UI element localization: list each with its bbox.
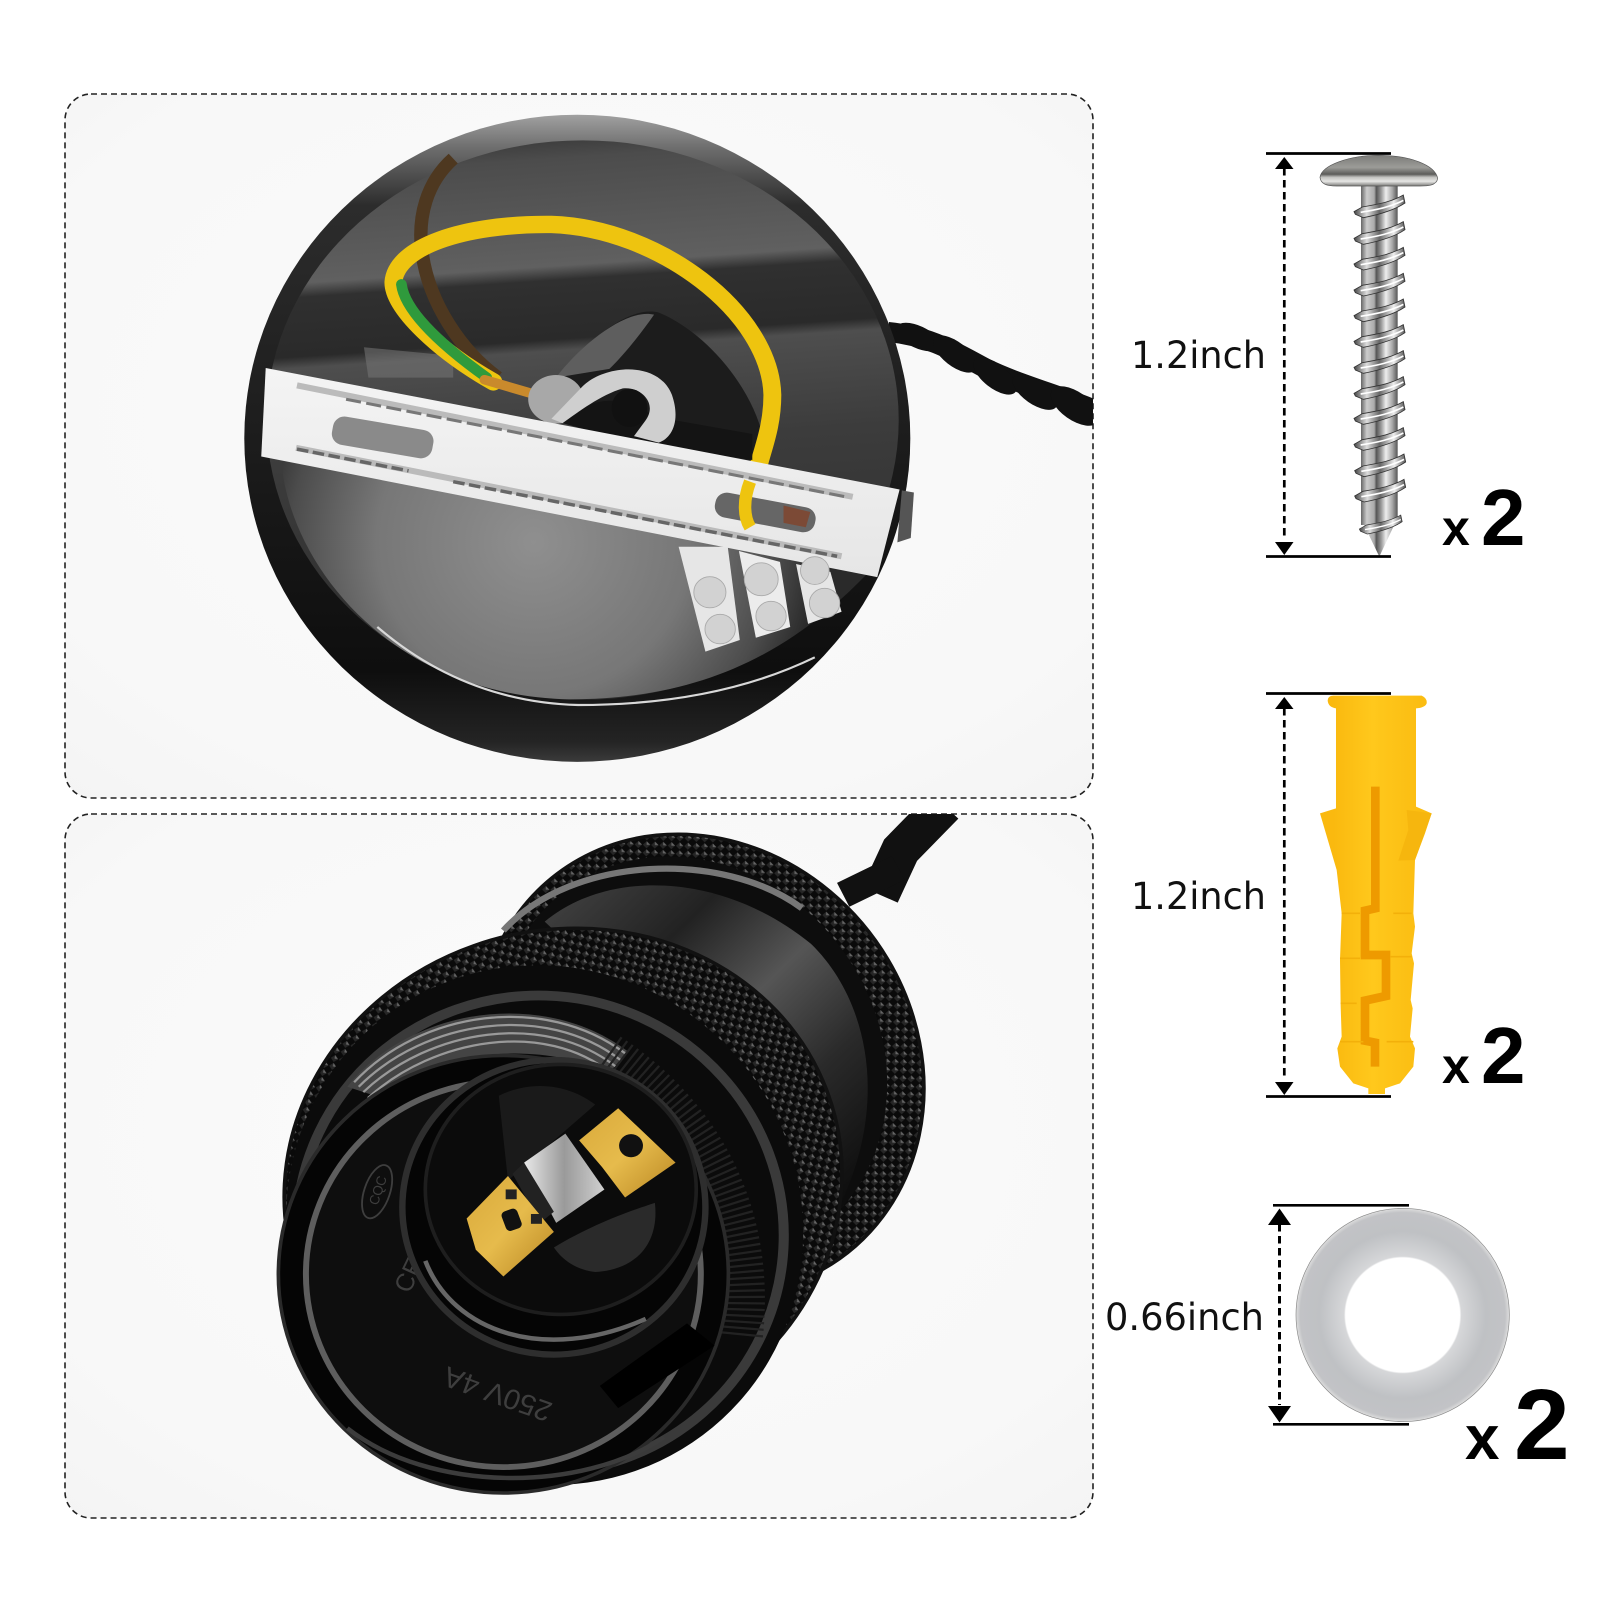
text: moulded markings: CE: [389, 1254, 430, 1297]
label: anchor length: 1.2inch: [1131, 875, 1266, 918]
icon: mounting bracket: [261, 368, 900, 577]
label: washer quantity: x: [1465, 1404, 1500, 1473]
text: moulded markings: [356, 1161, 556, 1427]
icon: front collar: [278, 1056, 728, 1493]
icon: washer: [1296, 1208, 1509, 1422]
dimension arrow: anchor length: [1266, 694, 1391, 1096]
label: washer quantity: [1465, 1369, 1570, 1481]
group: screw specification: [1131, 154, 1526, 562]
icon: socket opening: [402, 1060, 705, 1355]
icon: socket body: [501, 856, 888, 1208]
panel: ceiling canopy photo: [65, 94, 1106, 798]
label: anchor quantity: 2: [1481, 1011, 1526, 1100]
icon: brown wire: [421, 159, 498, 378]
text: moulded markings: CQC: [366, 1174, 390, 1207]
label: anchor quantity: [1442, 1011, 1526, 1100]
icon: terminal block: [679, 547, 842, 652]
label: washer quantity: 2: [1514, 1369, 1570, 1481]
label: screw quantity: 2: [1481, 473, 1526, 562]
group: washer specification: [1105, 1205, 1570, 1481]
text: moulded markings: 250V 4A: [439, 1360, 556, 1427]
icon: side screw: [897, 490, 914, 542]
icon: ceiling canopy disc: [244, 115, 914, 762]
group: wall anchor specification: [1131, 694, 1526, 1100]
icon: brass contact and clip: [467, 1108, 676, 1276]
icon: yellow wall anchor: [1320, 696, 1432, 1094]
dimension arrow: screw length: [1266, 154, 1391, 556]
label: washer diameter: 0.66inch: [1105, 1296, 1264, 1339]
icon: screw: [1320, 155, 1438, 557]
label: anchor quantity: x: [1442, 1038, 1470, 1094]
icon: black twisted cord: [888, 322, 1093, 426]
label: screw quantity: [1442, 473, 1526, 562]
label: screw length: 1.2inch: [1131, 334, 1266, 377]
label: screw quantity: x: [1442, 500, 1470, 556]
icon: earth wire yellow and green: [393, 224, 772, 464]
panel: lamp socket photo: [64, 813, 1094, 1519]
icon: front knurled ring: [282, 926, 842, 1341]
icon: cord grommet: [528, 369, 752, 460]
icon: rear knurled collar: [502, 832, 926, 1271]
icon: threaded sleeve: [286, 965, 804, 1484]
dimension arrow: washer diameter: [1268, 1205, 1409, 1424]
icon: black twisted cord: [843, 806, 944, 895]
